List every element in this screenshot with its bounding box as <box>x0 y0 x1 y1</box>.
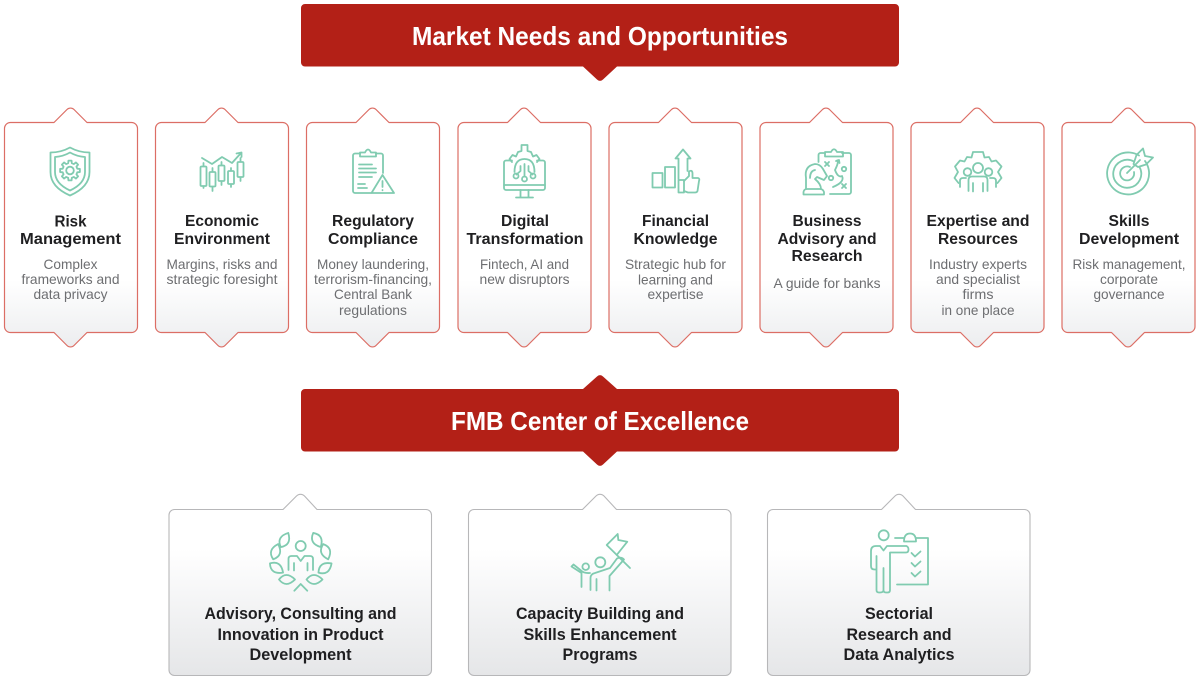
panel: Capacity Building and Skills Enhancement Programs: Programs <box>562 645 638 664</box>
panel: Risk Management: Risk <box>54 214 87 230</box>
panel: Business Advisory and Research: Business <box>792 213 862 230</box>
panel: Risk Management: frameworks and <box>22 271 120 287</box>
panel: Advisory, Consulting and Innovation in Product Development: Development <box>250 645 352 664</box>
panel: Skills Development: governance <box>1094 286 1165 302</box>
banner: FMB Center of Excellence: FMB Center of Excellence <box>451 406 749 436</box>
panel: Economic Environment: Margins, risks and <box>166 256 278 272</box>
panel: Skills Development: Development <box>1079 231 1180 248</box>
panel: Sectorial Research and Data Analytics: Data Analytics <box>844 645 954 664</box>
panel: Regulatory Compliance: Money laundering, <box>317 256 429 272</box>
icon: clipboard strategy with knight <box>804 149 851 194</box>
icon: monitor with circuit gear <box>504 145 545 198</box>
panel: Expertise and Resources: and specialist <box>936 271 1020 287</box>
panel: Skills Development: Risk management, <box>1072 256 1186 272</box>
icon: clipboard with warning <box>353 150 394 193</box>
panel: Risk Management <box>4 108 138 347</box>
panel: Financial Knowledge: Financial <box>642 213 709 230</box>
panel: Advisory, Consulting and Innovation in Product Development <box>169 494 432 676</box>
panel: Regulatory Compliance: Central Bank <box>334 286 413 302</box>
panel: Business Advisory and Research: Advisory and <box>778 231 876 248</box>
panel: Digital Transformation: Transformation <box>466 231 584 248</box>
panel: Skills Development <box>1062 108 1195 347</box>
panel: Economic Environment: Economic <box>185 213 259 230</box>
panel: Financial Knowledge: Strategic hub for <box>625 256 726 272</box>
icon: presenter with checklist <box>871 530 928 592</box>
panel: Regulatory Compliance <box>306 108 440 347</box>
panel: Expertise and Resources: Expertise and <box>926 213 1030 230</box>
icon: bars, arrow and thumbs up <box>652 150 699 192</box>
panel: Capacity Building and Skills Enhancement Programs: Skills Enhancement <box>524 625 677 644</box>
icon: shield with gear <box>50 148 90 196</box>
panel: Business Advisory and Research: Research <box>792 248 862 265</box>
icon: candlestick chart <box>200 152 244 191</box>
banner: Market Needs and Opportunities: Market Needs and Opportunities <box>412 21 788 51</box>
panel: Financial Knowledge: Knowledge <box>634 231 718 248</box>
panel: Regulatory Compliance: regulations <box>339 302 407 318</box>
panel: Economic Environment: Environment <box>174 231 271 248</box>
panel: Financial Knowledge <box>609 108 742 347</box>
banner: FMB Center of Excellence <box>301 375 899 466</box>
panel: Risk Management: Management <box>20 231 122 248</box>
panel: Business Advisory and Research: A guide for banks <box>774 275 880 291</box>
panel: Expertise and Resources: Industry experts <box>929 256 1027 272</box>
panel: Digital Transformation <box>458 108 591 347</box>
panel: Expertise and Resources <box>911 108 1044 347</box>
icon: people raising a flag <box>572 534 630 590</box>
panel: Risk Management: data privacy <box>34 286 108 302</box>
panel: Digital Transformation: Digital <box>501 213 549 230</box>
icon: target with arrow <box>1107 148 1153 194</box>
panel: Economic Environment <box>156 108 288 347</box>
panel: Advisory, Consulting and Innovation in Product Development: Innovation in Product <box>218 625 384 644</box>
panel: Regulatory Compliance: Compliance <box>328 231 418 248</box>
banner: Market Needs and Opportunities <box>301 4 899 81</box>
panel: Expertise and Resources: Resources <box>938 231 1018 248</box>
panel: Sectorial Research and Data Analytics: Research and <box>846 625 952 644</box>
panel: Economic Environment: strategic foresight <box>166 271 278 287</box>
panel: Capacity Building and Skills Enhancement Programs: Capacity Building and <box>516 604 684 623</box>
panel: Skills Development: corporate <box>1100 271 1158 287</box>
panel: Expertise and Resources: in one place <box>942 302 1015 318</box>
panel: Financial Knowledge: expertise <box>648 286 704 302</box>
panel: Capacity Building and Skills Enhancement Programs <box>468 494 731 676</box>
panel: Digital Transformation: Fintech, AI and <box>480 256 569 272</box>
panel: Risk Management: Complex <box>44 256 98 272</box>
icon: laurel wreath with person <box>267 531 334 591</box>
icon: team inside gear <box>954 152 1002 192</box>
panel: Regulatory Compliance: terrorism-financing, <box>314 271 432 287</box>
panel: Digital Transformation: new disruptors <box>480 271 570 287</box>
panel: Regulatory Compliance: Regulatory <box>332 213 414 230</box>
panel: Business Advisory and Research <box>760 108 893 347</box>
panel: Skills Development: Skills <box>1108 213 1150 230</box>
panel: Advisory, Consulting and Innovation in Product Development: Advisory, Consulting and <box>204 604 396 623</box>
panel: Financial Knowledge: learning and <box>638 272 713 288</box>
panel: Expertise and Resources: firms <box>962 286 994 302</box>
panel: Sectorial Research and Data Analytics <box>768 494 1030 676</box>
panel: Sectorial Research and Data Analytics: Sectorial <box>865 604 933 623</box>
